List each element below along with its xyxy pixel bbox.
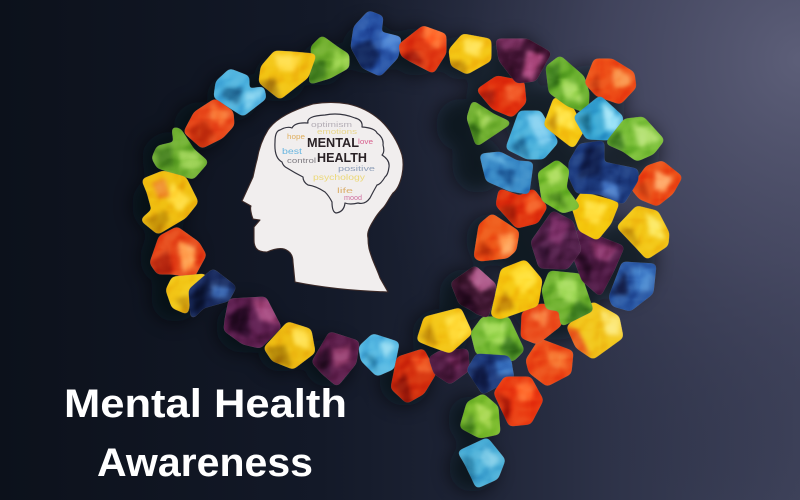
ball: cyan mid [507,112,557,158]
brain word cloud: psychology [313,173,365,182]
brain word cloud: mood [344,195,362,202]
brain word cloud [282,120,375,202]
brain outline [275,114,389,213]
brain word cloud: life [337,186,353,195]
title line 2: Awareness [97,441,313,485]
ball: purple right [568,230,623,295]
crumpled paper balls [142,12,681,487]
ball: green right [607,118,663,160]
ball: navy left [190,270,235,318]
head shape [242,102,403,292]
ball: purple bottom [313,333,358,385]
ball: yellow far right [618,207,668,258]
ball: red centre [497,190,546,227]
ball: purple bottom left [225,298,280,347]
ball: blue top [352,12,400,75]
ball: yellow centre right [573,193,618,239]
paper shadows [132,22,660,492]
brain word cloud: best [282,147,303,156]
ball: yellow upper centre [545,98,583,147]
ball: green upper [547,57,588,112]
ball: green centre [539,161,579,212]
ball: red lower [495,378,542,425]
ball: navy double [570,142,637,203]
ball: purple centre [532,212,580,268]
title [64,382,347,485]
ball: blue right [610,263,655,310]
brain word cloud: HEALTH [317,151,367,165]
ball: green lower [461,395,499,437]
paper head silhouette with brain [242,102,403,292]
ball: orange left [151,228,205,277]
brain word cloud: control [287,156,316,165]
ball: purple upper [497,40,550,82]
ball: orange upper right [586,60,635,103]
ball: yellow small [167,275,205,313]
ball: yellow bottom cluster [418,309,471,352]
ball: green mid [543,272,592,325]
ball: cyan upper right [575,97,622,139]
ball: purple small bottom [430,350,468,383]
ball: blue bottom cluster [468,355,513,393]
ball: red upper [478,77,525,116]
ball: green left upper [468,102,510,145]
ball: orange far right [632,162,681,205]
ball: green left [153,128,207,178]
brain word cloud: hope [287,132,305,141]
ball: cyan bottom tip [459,439,504,487]
brain word cloud: MENTAL [307,136,359,150]
ball: green by yellow [310,37,348,83]
ball: blue left mid [481,153,532,193]
ball: red orange top [400,27,445,72]
ball: orange mid left [475,215,518,260]
brain word cloud: positive [338,164,375,173]
ball: yellow left [142,172,197,233]
ball: yellow bottom [265,323,314,368]
brain word cloud: love [358,137,373,146]
ball: cyan upper left [215,70,265,115]
ball: red bottom [392,350,435,402]
ball: cyan bottom [360,335,398,375]
ball: yellow upper left [260,52,315,98]
ball: yellow top [450,35,490,73]
ball: purple mid left [452,267,495,317]
brain word cloud: optimism [311,120,352,129]
brain word cloud: emotions [317,127,357,136]
ball: green bottom cluster [472,318,523,360]
ball: yellow lower right [568,303,622,358]
title line 1: Mental Health [64,382,347,426]
ball: red orange left [185,100,233,147]
ball: yellow mid [492,261,541,318]
ball: orange mid [522,305,563,343]
ball: orange lower [527,340,572,385]
